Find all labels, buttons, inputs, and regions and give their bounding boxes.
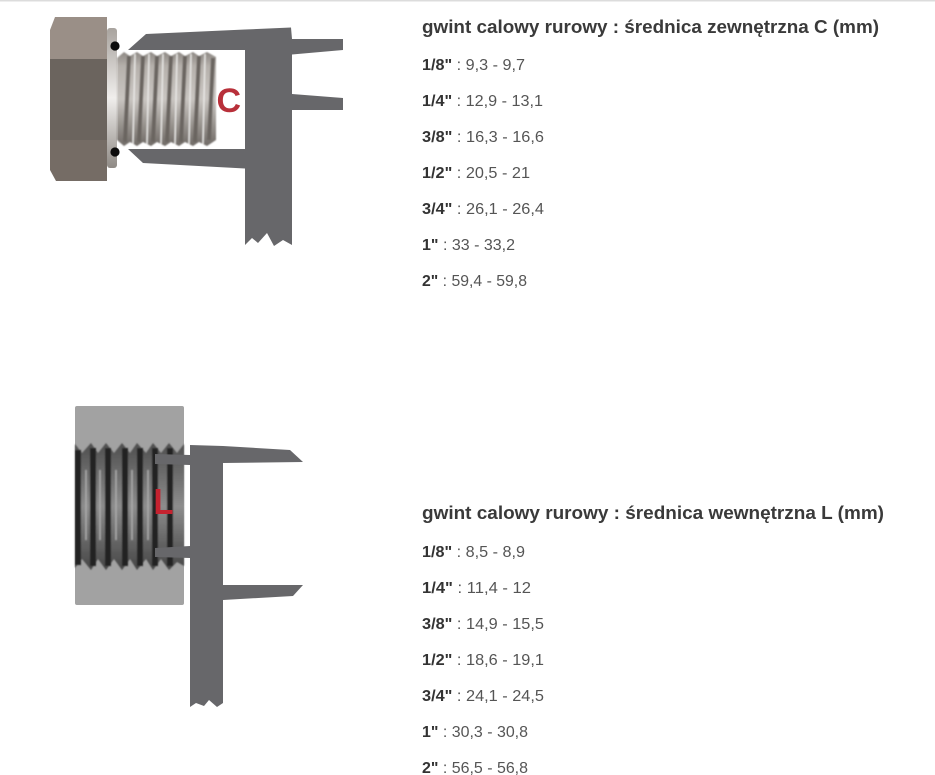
seal dots — [110, 41, 120, 157]
rows: 1/8" : 9,3 - 9,7 — [422, 57, 525, 74]
table: external diameter C — [422, 17, 879, 290]
rows: 1" : 30,3 - 30,8 — [422, 724, 528, 741]
rows — [422, 57, 544, 290]
threaded shank — [117, 52, 216, 146]
diagram: internal thread measured with caliper — [75, 406, 303, 707]
nut body — [75, 406, 184, 605]
rows: 1/2" : 18,6 - 19,1 — [422, 652, 544, 669]
heading: gwint calowy rurowy : średnica wewnętrzna L (mm) — [422, 503, 884, 523]
rows: 1/2" : 20,5 - 21 — [422, 165, 530, 182]
rows: 2" : 59,4 - 59,8 — [422, 273, 527, 290]
rows: 3/8" : 14,9 - 15,5 — [422, 616, 544, 633]
diagram: external thread measured with caliper — [50, 17, 343, 246]
heading: gwint calowy rurowy : średnica zewnętrzna C (mm) — [422, 17, 879, 37]
hex bolt head — [50, 17, 107, 181]
letter C: C — [216, 82, 241, 120]
rows: 3/8" : 16,3 - 16,6 — [422, 129, 544, 146]
table: internal diameter L — [422, 503, 884, 775]
rows: 1" : 33 - 33,2 — [422, 237, 515, 254]
rows: 1/8" : 8,5 - 8,9 — [422, 544, 525, 561]
rows — [422, 544, 544, 775]
rows: 1/4" : 12,9 - 13,1 — [422, 93, 543, 110]
rows: 3/4" : 24,1 - 24,5 — [422, 688, 544, 705]
rows: 3/4" : 26,1 - 26,4 — [422, 201, 544, 218]
rows: 1/4" : 11,4 - 12 — [422, 580, 531, 597]
internal thread — [75, 443, 184, 570]
washer — [107, 28, 117, 168]
letter L: L — [154, 481, 174, 522]
caliper — [155, 445, 303, 707]
caliper — [128, 28, 343, 246]
